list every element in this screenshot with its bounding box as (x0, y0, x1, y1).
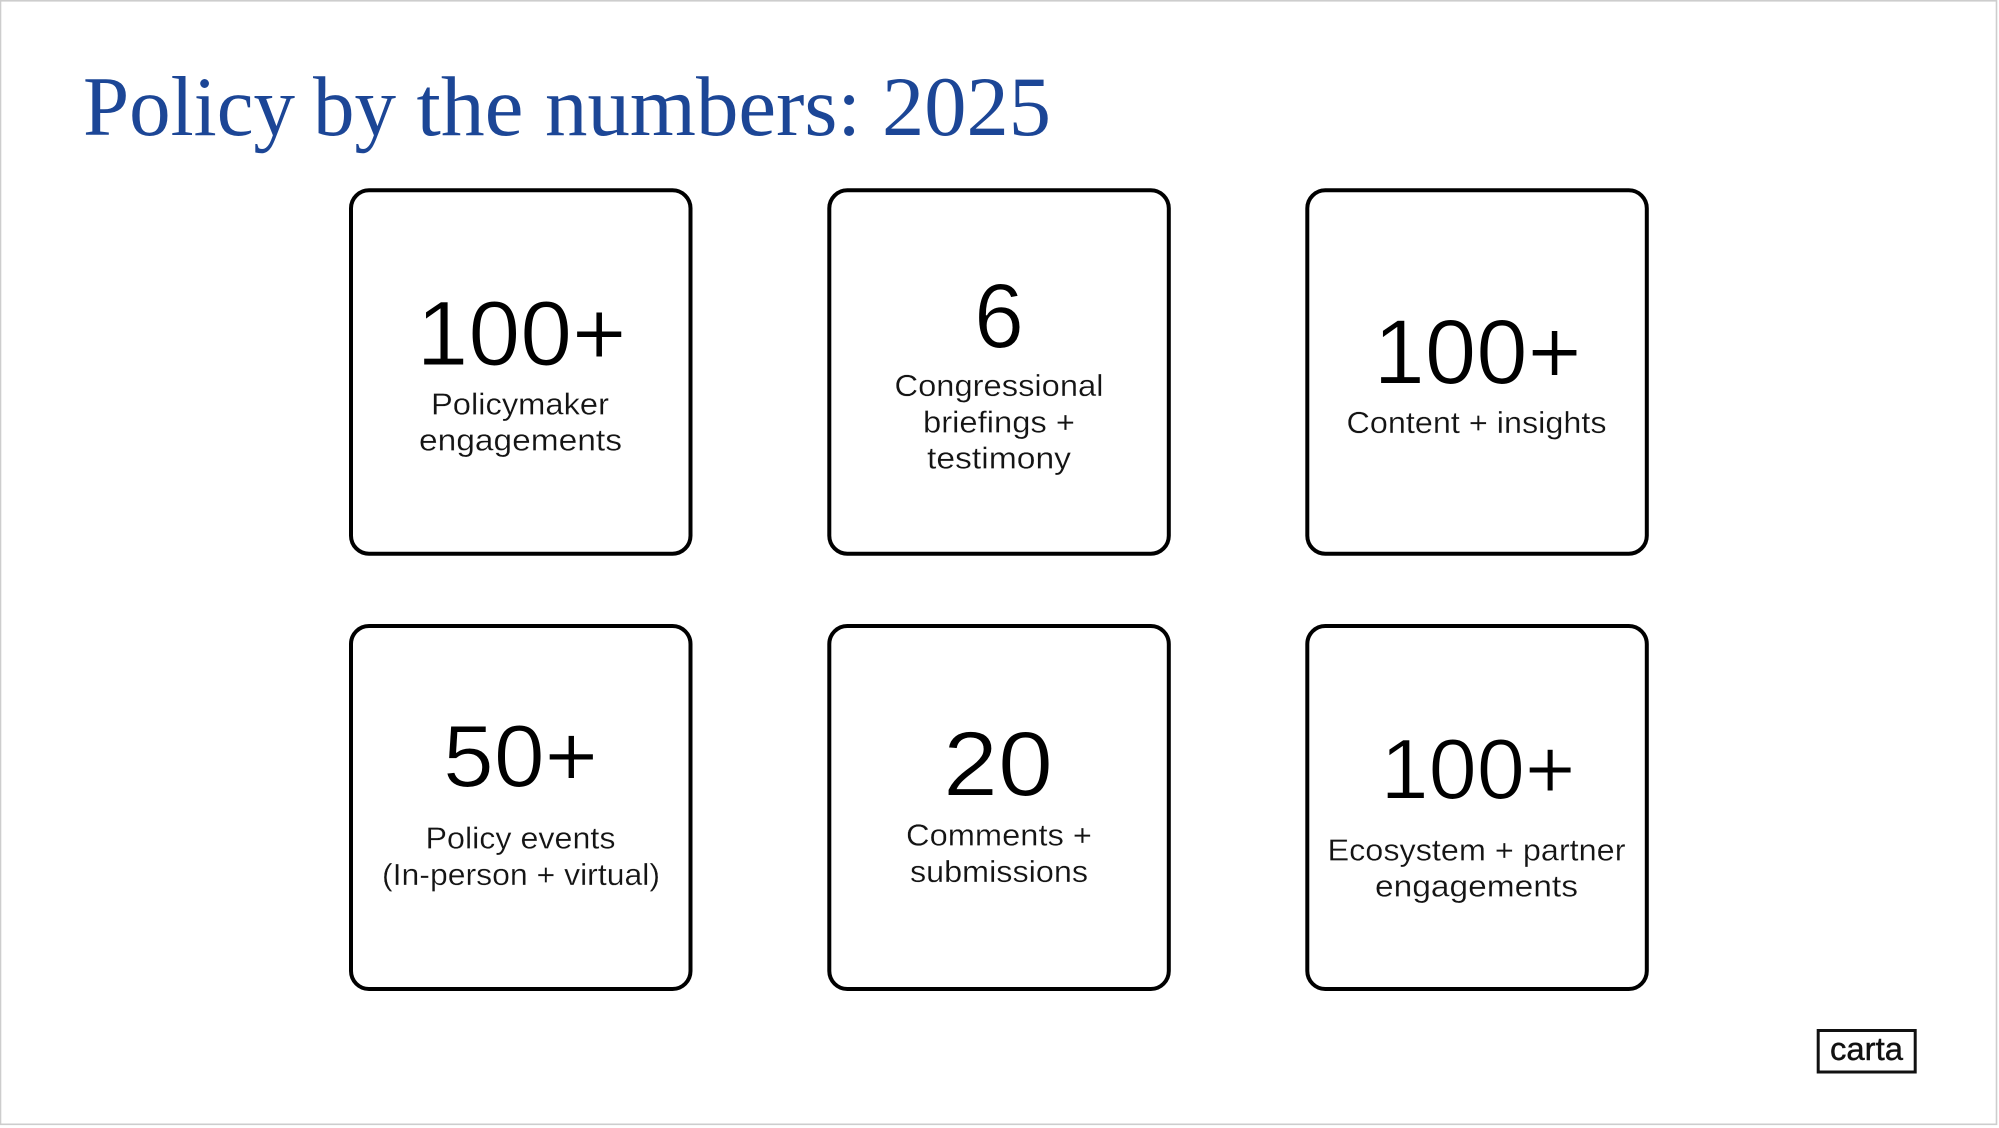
card border (351, 626, 690, 989)
panel: policymaker engagements (351, 190, 690, 554)
stat: 100+: 100+ (1380, 722, 1576, 817)
title: Policy (83, 60, 295, 154)
card border (829, 190, 1169, 554)
panel: ecosystem and partner engagements (1307, 626, 1647, 989)
title: numbers: (545, 60, 861, 154)
label: testimony (927, 440, 1072, 475)
title: by (313, 60, 396, 154)
card border (829, 626, 1169, 989)
label: Congressional (894, 368, 1104, 403)
label: Comments + (906, 818, 1092, 853)
label: Policymaker (431, 386, 609, 421)
label: engagements (1375, 869, 1578, 904)
label (906, 818, 1092, 889)
title (83, 60, 1051, 154)
logo: carta: carta (1830, 1031, 1903, 1067)
stat: 100+: 100+ (416, 283, 626, 385)
label: Policy events (426, 820, 616, 855)
stat: 6: 6 (974, 265, 1024, 367)
label: engagements (419, 423, 622, 458)
label (1328, 833, 1626, 904)
title: 2025 (882, 60, 1051, 154)
panel: congressional briefings (829, 190, 1169, 554)
label: (In-person + virtual) (382, 857, 660, 892)
label: Content + insights (1346, 405, 1606, 440)
panel: comments and submissions (829, 626, 1169, 989)
card border (1307, 190, 1647, 554)
panel: content and insights (1307, 190, 1647, 554)
stat: 50+: 50+ (443, 707, 598, 806)
label (382, 820, 660, 892)
title: the (416, 60, 524, 154)
label (419, 386, 622, 458)
stat: 100+: 100+ (1374, 301, 1582, 403)
label: submissions (910, 854, 1088, 889)
label: briefings + (923, 404, 1075, 439)
label: Ecosystem + partner (1328, 833, 1626, 868)
logo: carta (1818, 1030, 1915, 1072)
card border (1307, 626, 1647, 989)
panel: policy events (351, 626, 690, 989)
stat: 20: 20 (943, 713, 1053, 815)
label (894, 368, 1104, 475)
card border (351, 190, 690, 554)
